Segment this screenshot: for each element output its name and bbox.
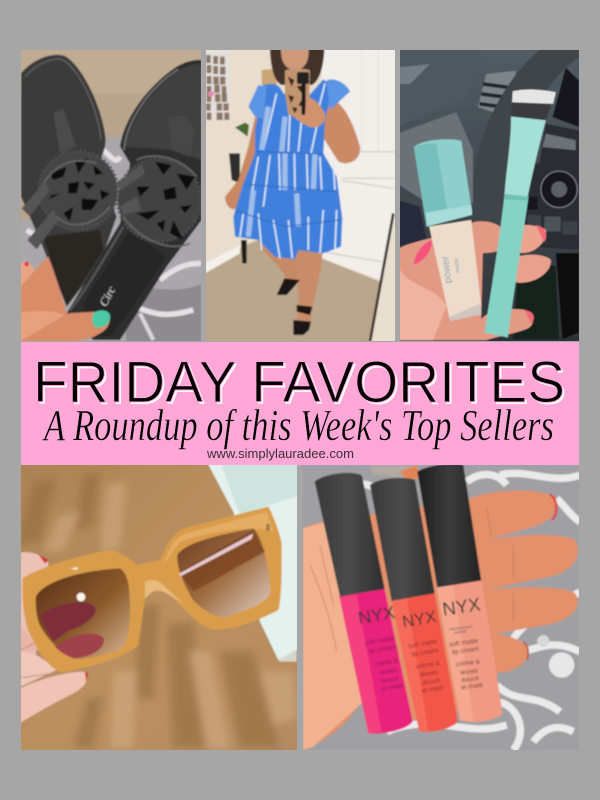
white wall corner xyxy=(207,462,300,660)
steering wheel xyxy=(473,47,579,226)
peach tube: lèvres xyxy=(460,667,479,677)
white door xyxy=(322,47,395,280)
right sandal xyxy=(67,60,202,340)
patterned rug xyxy=(320,473,580,750)
website url: www.simplylauradee.com xyxy=(206,446,354,461)
peach tube xyxy=(417,464,503,722)
photo: blue striped dress mirror selfie xyxy=(206,50,395,341)
blue striped dress xyxy=(233,79,350,259)
peach tube: MAKEUP xyxy=(454,629,467,635)
hand holding sandals xyxy=(17,257,110,343)
photo: three NYX lip creams in hand xyxy=(303,465,579,750)
plant and side table xyxy=(235,123,249,137)
pink tube: lip cream xyxy=(368,644,397,655)
concealer bottle xyxy=(414,139,481,321)
pink tube: soft matte xyxy=(364,635,395,647)
photo: black sandals xyxy=(21,50,201,341)
fingers behind left lens xyxy=(40,602,96,642)
hair and face xyxy=(270,47,324,85)
hand on phone xyxy=(290,97,325,127)
hand xyxy=(17,552,88,725)
peach tube: soft matte xyxy=(449,638,479,649)
coral tube: NYX xyxy=(401,607,438,632)
pink tube: crème à xyxy=(373,658,398,669)
pink tube: douce xyxy=(380,675,400,685)
title: FRIDAY FAVORITES xyxy=(33,350,565,415)
hand and fingers xyxy=(397,221,551,340)
peach tube: et mate xyxy=(461,682,484,692)
coral tube: soft matte xyxy=(408,638,438,650)
concealer bottle: matte xyxy=(454,257,462,273)
black sandals on feet xyxy=(277,278,312,335)
left lens xyxy=(36,568,130,659)
mirror frame edge xyxy=(372,213,397,343)
peach tube: crème à xyxy=(455,658,480,669)
right lens xyxy=(177,528,271,618)
coral tube: crème à xyxy=(415,660,440,671)
car dashboard xyxy=(397,47,483,127)
mint makeup brush xyxy=(485,89,556,338)
peach tube: lip cream xyxy=(452,646,480,656)
concealer bottle: power xyxy=(440,255,454,284)
coral tube: et mate xyxy=(421,684,445,695)
pink tube: et mate xyxy=(381,682,404,693)
pink title banner xyxy=(21,342,579,465)
pink tube: NYX xyxy=(357,602,396,628)
wood floor streaks xyxy=(17,472,297,748)
carpet xyxy=(202,240,380,343)
title: FRIDAY FAVORITES xyxy=(35,352,567,417)
coral tube: lip cream xyxy=(411,647,439,659)
hand xyxy=(303,490,578,750)
coral tube: lèvres xyxy=(420,669,439,679)
pink tube xyxy=(315,473,413,734)
photo: tan square sunglasses xyxy=(21,465,297,750)
pink tube: lèvres xyxy=(379,667,398,677)
left sandal xyxy=(21,55,117,307)
right sandal medallion xyxy=(115,156,201,246)
coral tube xyxy=(370,478,458,732)
peach tube: douce xyxy=(461,675,480,684)
photo: foundation bottle and makeup brush xyxy=(400,50,579,341)
right sandal: Circ xyxy=(96,283,119,309)
sunglasses frame xyxy=(22,507,282,672)
photo wall collage xyxy=(205,50,230,120)
coral tube: douce xyxy=(422,677,441,687)
gray patterned rug xyxy=(17,137,207,343)
left sandal medallion xyxy=(22,151,118,249)
arms and legs xyxy=(225,110,258,209)
phone with leopard case xyxy=(285,69,310,116)
wheel control buttons xyxy=(528,134,577,235)
peach tube: PROFESSIONAL xyxy=(450,624,474,632)
peach tube: NYX xyxy=(441,593,482,620)
